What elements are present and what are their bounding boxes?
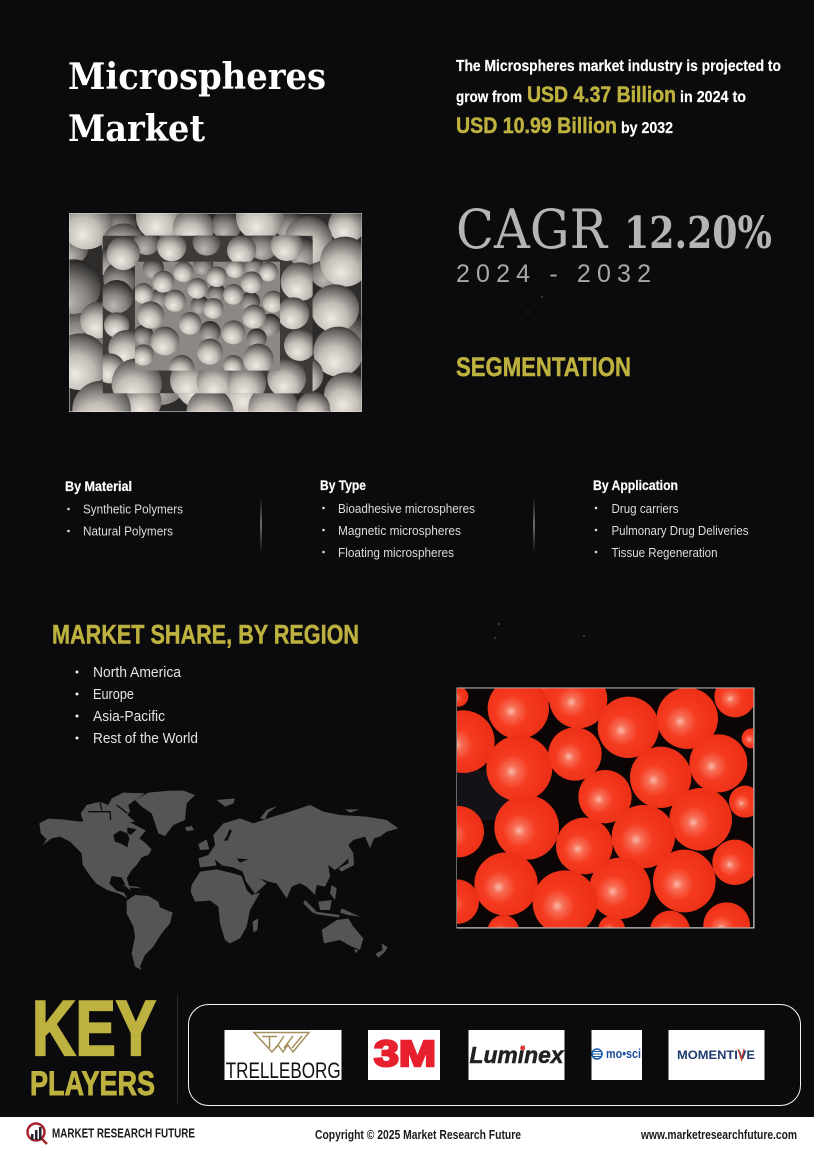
region list: Europe	[93, 686, 134, 703]
CAGR years: 2024 - 2032	[456, 260, 651, 288]
sparkle dots	[494, 296, 585, 639]
region list: Asia-Pacific	[93, 708, 165, 725]
region list	[76, 664, 198, 747]
logo: mo-sci	[592, 1030, 642, 1080]
CAGR heading: 12.20%	[624, 208, 772, 259]
new zealand and tasmania	[354, 943, 388, 958]
footer: Copyright © 2025 Market Research Future	[315, 1128, 521, 1142]
projection text block: in 2024 to	[680, 89, 746, 106]
greenland	[135, 791, 195, 836]
north america	[39, 819, 152, 898]
logo: 3M: 3M	[374, 1033, 436, 1074]
title	[68, 56, 326, 150]
segment: by material: Synthetic Polymers	[83, 502, 183, 516]
key players panel	[188, 1004, 800, 1106]
region list: North America	[93, 664, 182, 681]
CAGR heading: CAGR	[456, 198, 608, 261]
divider	[534, 497, 535, 553]
logo: 3M	[368, 1030, 440, 1080]
arctic islands	[81, 793, 145, 823]
logo: momentive	[668, 1030, 764, 1080]
region list: Rest of the World	[93, 730, 198, 747]
title: Market	[68, 108, 205, 150]
iceland and svalbard	[185, 798, 235, 831]
segment: by material: Natural Polymers	[83, 524, 173, 538]
CAGR heading	[456, 198, 772, 261]
caribbean	[122, 885, 142, 888]
segment: by application: Tissue Regeneration	[612, 545, 718, 560]
logo: luminex: Luminex	[470, 1042, 565, 1068]
black sea	[237, 858, 248, 863]
south america	[127, 895, 173, 970]
logo: trelleborg	[224, 1030, 342, 1083]
world map	[39, 791, 398, 970]
heading: market share by region: MARKET SHARE, BY REGION	[52, 620, 359, 650]
eurasia	[198, 805, 398, 898]
segment: by application: Drug carriers	[612, 501, 679, 516]
heading: key players: KEY	[32, 984, 156, 1072]
hudson bay	[113, 827, 137, 847]
southeast asia islands	[303, 885, 360, 917]
segment: by type	[320, 477, 475, 560]
british isles and japan	[198, 839, 354, 872]
footer	[0, 1117, 814, 1150]
segment: by application: By Application	[593, 477, 678, 493]
arctic channels	[88, 802, 127, 820]
projection text block	[456, 58, 781, 138]
baltic	[224, 829, 232, 841]
segment: by type: By Type	[320, 477, 366, 493]
logo: trelleborg: TRELLEBORG	[226, 1058, 341, 1083]
projection text block: by 2032	[621, 120, 673, 137]
far north russia islands	[260, 806, 360, 819]
icon: market research future logo	[28, 1124, 47, 1144]
projection text block: USD 10.99 Billion	[456, 113, 617, 138]
segment: by material: By Material	[65, 478, 132, 494]
divider	[177, 995, 178, 1103]
africa	[191, 869, 260, 943]
heading: key players: PLAYERS	[30, 1065, 155, 1103]
logo: luminex	[468, 1030, 565, 1080]
segment: by type: Bioadhesive microspheres	[338, 501, 475, 516]
footer: MARKET RESEARCH FUTURE	[52, 1126, 195, 1140]
heading: key players	[30, 984, 156, 1103]
projection text block: grow from	[456, 89, 522, 106]
divider	[260, 497, 262, 553]
segment: by material	[65, 478, 183, 538]
logo: momentive: MOMENTIVE	[677, 1048, 755, 1062]
australia	[322, 918, 363, 950]
logo: mo-sci: mo•sci	[606, 1046, 641, 1061]
projection text block: USD 4.37 Billion	[527, 82, 676, 107]
segment: by type: Magnetic microspheres	[338, 523, 461, 538]
segment: by application	[593, 477, 749, 560]
image: grey microspheres	[69, 213, 362, 412]
heading: segmentation: SEGMENTATION	[456, 352, 631, 382]
image: red microspheres	[456, 688, 754, 928]
italian notch	[215, 859, 222, 866]
segment: by application: Pulmonary Drug Deliveries	[612, 523, 749, 538]
segment: by type: Floating microspheres	[338, 545, 454, 560]
madagascar	[253, 918, 258, 933]
title: Microspheres	[68, 56, 326, 98]
